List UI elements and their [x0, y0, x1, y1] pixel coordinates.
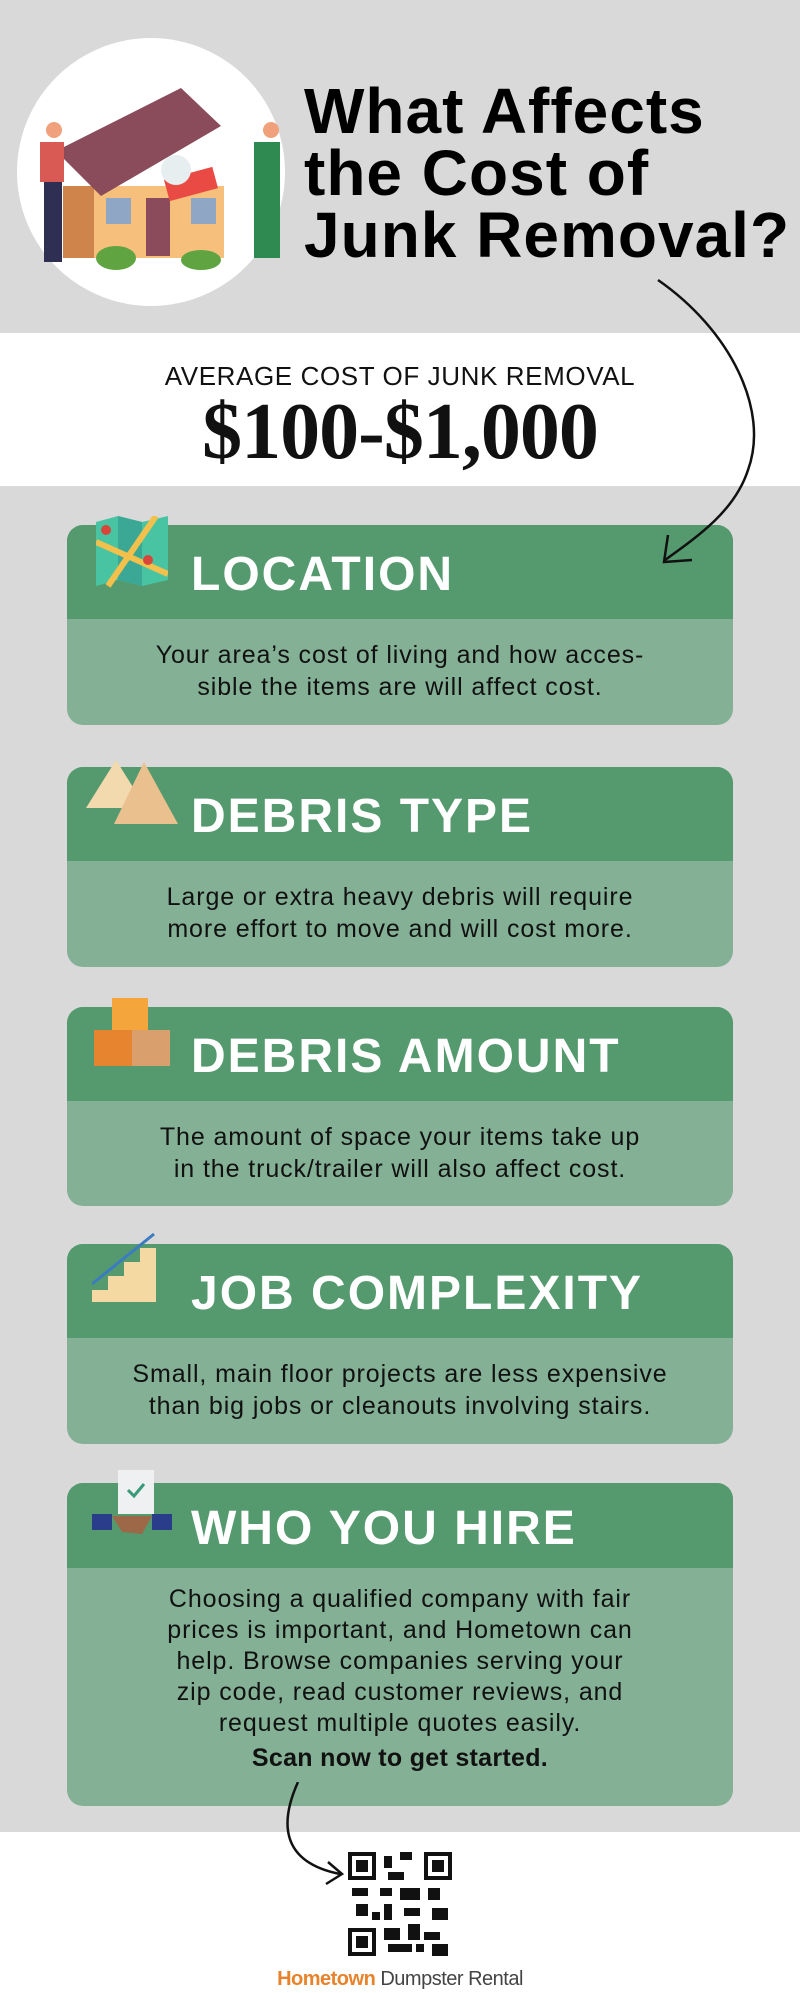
title: What Affects [304, 75, 705, 147]
icon: stairs [92, 1232, 156, 1302]
panel: who you hire: prices is important, and Hometown can [167, 1616, 633, 1644]
panel: location: Your area’s cost of living and how acces- [156, 641, 644, 669]
panel: debris type: Large or extra heavy debris will require [167, 883, 633, 911]
panel: debris type [67, 767, 733, 967]
panel: job complexity: JOB COMPLEXITY [191, 1267, 643, 1320]
panel: debris amount: The amount of space your items take up [160, 1123, 640, 1151]
icon: map [96, 516, 168, 588]
icon: handshake [92, 1470, 172, 1534]
panel: who you hire: request multiple quotes easily. [219, 1709, 581, 1737]
panel: job complexity [67, 1244, 733, 1444]
icon: boxes [94, 998, 170, 1066]
title: the Cost of [304, 137, 649, 209]
average cost band [0, 333, 800, 486]
logo: Hometown Dumpster Rental [277, 1968, 523, 1990]
panel: who you hire: help. Browse companies serving your [176, 1647, 623, 1675]
panel: debris amount: DEBRIS AMOUNT [191, 1030, 621, 1083]
icon: debris piles [86, 760, 178, 824]
average cost band: $100-$1,000 [202, 388, 598, 476]
panel: who you hire: WHO YOU HIRE [191, 1502, 577, 1555]
panel: who you hire [67, 1483, 733, 1806]
panel: location [67, 525, 733, 725]
panel: who you hire: Scan now to get started. [252, 1744, 548, 1772]
QR code [348, 1852, 452, 1956]
arrow: to QR [286, 1782, 344, 1885]
panel: who you hire: zip code, read customer reviews, and [177, 1678, 623, 1706]
panel: who you hire: Choosing a qualified company with fair [169, 1585, 631, 1613]
average cost band: AVERAGE COST OF JUNK REMOVAL [165, 361, 635, 391]
hero illustration [17, 38, 285, 306]
panel: job complexity: Small, main floor projects are less expensive [132, 1360, 668, 1388]
arrow: title to location [657, 279, 756, 564]
panel: location: LOCATION [191, 548, 454, 601]
title: Junk Removal? [304, 199, 790, 271]
panel: location: sible the items are will affect cost. [197, 673, 603, 701]
title [304, 75, 790, 271]
panel: debris amount [67, 1007, 733, 1206]
panel: debris type: DEBRIS TYPE [191, 790, 533, 843]
footer [0, 1832, 800, 1993]
panel: job complexity: than big jobs or cleanouts involving stairs. [149, 1392, 651, 1420]
panel: debris type: more effort to move and will cost more. [167, 915, 633, 943]
panel: debris amount: in the truck/trailer will also affect cost. [174, 1155, 626, 1183]
